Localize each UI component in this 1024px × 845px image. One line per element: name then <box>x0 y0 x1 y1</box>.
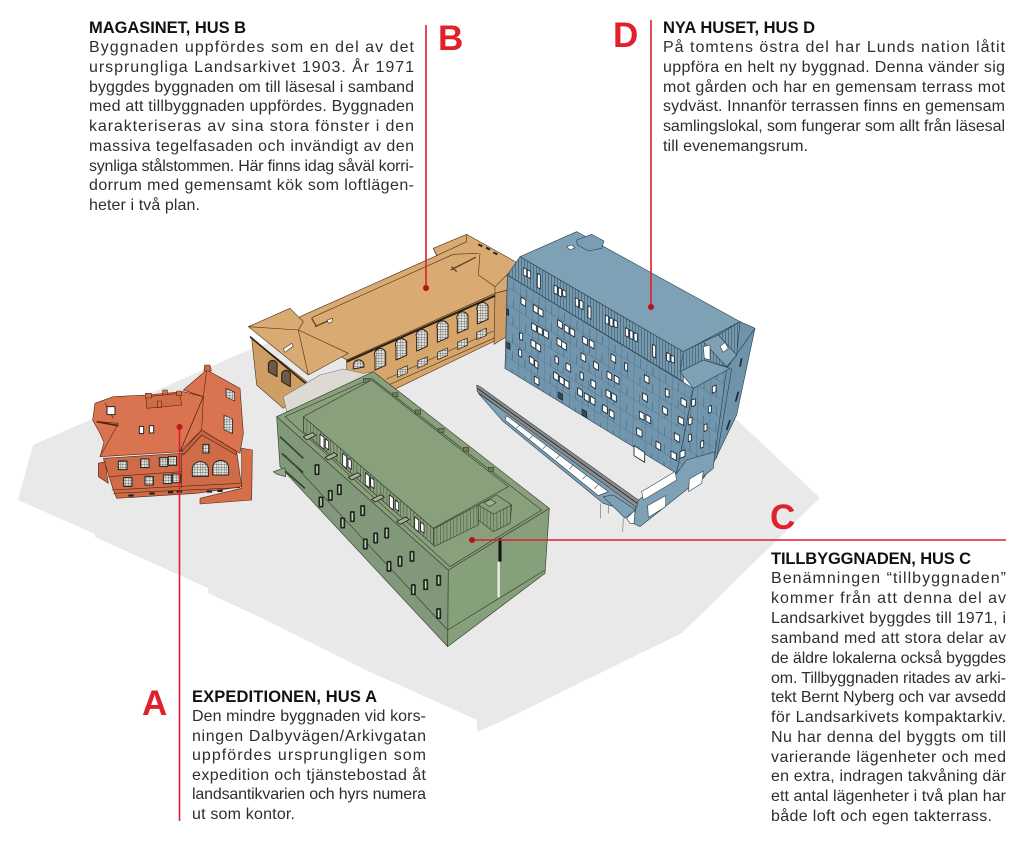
body B: dorrum med gemensamt kök som loftlägen- <box>89 177 414 194</box>
chimney top <box>204 365 211 371</box>
body D <box>663 38 1006 155</box>
side plinth <box>200 448 252 504</box>
body D: till evenemangsrum. <box>663 138 808 155</box>
letter A: A <box>142 684 167 723</box>
body C: ett antal lägenheter i två plan har <box>771 787 1007 805</box>
back gable roof <box>180 370 243 453</box>
body C: om. Tillbyggnaden ritades av arki- <box>771 670 1006 687</box>
building: Tillbyggnaden, hus C <box>273 372 549 647</box>
body C: Landsarkivet byggdes till 1971, i <box>771 610 1006 627</box>
facade windows <box>519 297 716 462</box>
left wall windows <box>315 465 440 618</box>
podium <box>630 452 715 527</box>
body B <box>89 39 415 214</box>
body B: karakteriseras av sina stora fönster i den <box>89 118 414 135</box>
leader line A <box>176 424 182 821</box>
walls <box>103 430 242 498</box>
body C: varierande lägenheter och med <box>771 749 1006 766</box>
dormer and chimneys <box>146 393 182 408</box>
right wall <box>448 508 549 647</box>
body D: sydväst. Innanför terrassen finns en gemensam <box>663 98 1005 115</box>
roof <box>520 232 740 352</box>
slatted end <box>434 505 478 547</box>
body B: Byggnaden uppfördes som en del av det <box>89 39 415 56</box>
leader line D <box>648 20 654 310</box>
heading C: TILLBYGGNADEN, HUS C <box>771 550 971 568</box>
side vents <box>224 388 235 434</box>
roof drains <box>363 378 494 471</box>
upper roof <box>303 380 508 528</box>
body A <box>192 708 427 823</box>
long brick wall <box>347 293 497 392</box>
body B: massiva tegelfasaden och invändigt av den <box>89 138 414 155</box>
body B: heter i två plan. <box>89 196 200 214</box>
facade slot <box>495 538 504 562</box>
body D: uppföra en helt ny byggnad. Denna vänder sig <box>663 59 1005 76</box>
body C: både loft och egen takterrass. <box>771 807 992 825</box>
attic windows <box>523 268 702 363</box>
letter D: D <box>613 16 638 55</box>
body B: ursprungliga Landsarkivet 1903. År 1971 <box>89 57 414 76</box>
letter B: B <box>438 19 463 58</box>
left wall <box>277 417 448 647</box>
body A: Den mindre byggnaden vid kors- <box>192 708 426 725</box>
body C: tekt Bernt Nyberg och var avsedd <box>771 689 1006 706</box>
body C: kommer från att denna del av <box>771 589 1006 607</box>
text panel: Tillbyggnaden, hus C <box>770 498 1007 825</box>
building: Magasinet, hus B <box>248 234 518 412</box>
body C: de äldre lokalerna också byggdes <box>771 649 1006 667</box>
body C: Benämningen “tillbyggnaden” <box>771 570 1006 587</box>
ramp wedge <box>478 393 637 513</box>
roof deck <box>277 372 549 570</box>
body A: ningen Dalbyvägen/Arkivgatan <box>192 728 426 745</box>
leader line B <box>423 25 429 291</box>
left pavilion roof <box>248 308 348 375</box>
grey annex <box>283 369 373 412</box>
body C: Nu har denna del byggts om till <box>771 729 1006 746</box>
cellar openings <box>128 490 223 497</box>
heading D: NYA HUSET, HUS D <box>663 19 815 37</box>
side panel <box>677 368 727 473</box>
building: Nya huset, hus D <box>477 232 755 532</box>
ground shadow <box>18 270 820 732</box>
side balconies <box>280 437 305 488</box>
ramp roof strip <box>477 385 638 508</box>
heading B: MAGASINET, HUS B <box>89 19 246 37</box>
front windows <box>118 444 209 486</box>
body C: samband med att stora delar av <box>771 630 1006 647</box>
attic band <box>507 257 683 382</box>
left pavilion wall <box>252 338 307 408</box>
text panel: Expeditionen, hus A <box>142 684 427 823</box>
text panel: Nya huset, hus D <box>613 16 1006 155</box>
body A: landsantikvarien och hyrs numera <box>192 786 426 803</box>
body D: mot gården och har en gemensam terrass mot <box>663 78 1006 96</box>
terrace and gable <box>680 360 730 388</box>
attic facade <box>303 417 433 545</box>
roof windows <box>107 407 154 434</box>
arched windows <box>353 303 488 370</box>
body A: expedition och tjänstebostad åt <box>192 766 427 784</box>
right tower <box>677 322 755 478</box>
body B: synliga stålstommen. Här finns idag såväl korri- <box>89 157 414 175</box>
body C: en extra, indragen takvåning där <box>771 767 1007 785</box>
terrace plates <box>303 433 409 524</box>
letter C: C <box>770 498 795 537</box>
arched windows <box>192 460 229 476</box>
body D: På tomtens östra del har Lunds nation låtit <box>663 38 1006 56</box>
body D: samlingslokal, som fungerar som allt från läsesal <box>663 117 1005 135</box>
building: Expeditionen, hus A <box>93 365 252 504</box>
lower windows <box>397 328 487 377</box>
text panel: Magasinet, hus B <box>89 19 463 214</box>
leader line C <box>469 537 1006 543</box>
heading A: EXPEDITIONEN, HUS A <box>192 688 377 706</box>
landing <box>603 495 636 518</box>
main roof <box>93 392 203 457</box>
body B: byggdes byggnaden om till läsesal i samband <box>89 79 414 96</box>
long facade <box>505 275 693 473</box>
body A: ut som kontor. <box>192 806 295 823</box>
body C: för Landsarkivets kompaktarkiv. <box>771 709 1006 726</box>
roof box <box>478 495 512 532</box>
attic windows <box>320 434 424 533</box>
body A: uppfördes ursprungligen som <box>192 747 426 764</box>
body B: med att tillbyggnaden uppfördes. Byggnaden <box>89 98 414 115</box>
roof box <box>577 234 604 251</box>
body C <box>771 570 1007 825</box>
roof <box>298 234 518 360</box>
